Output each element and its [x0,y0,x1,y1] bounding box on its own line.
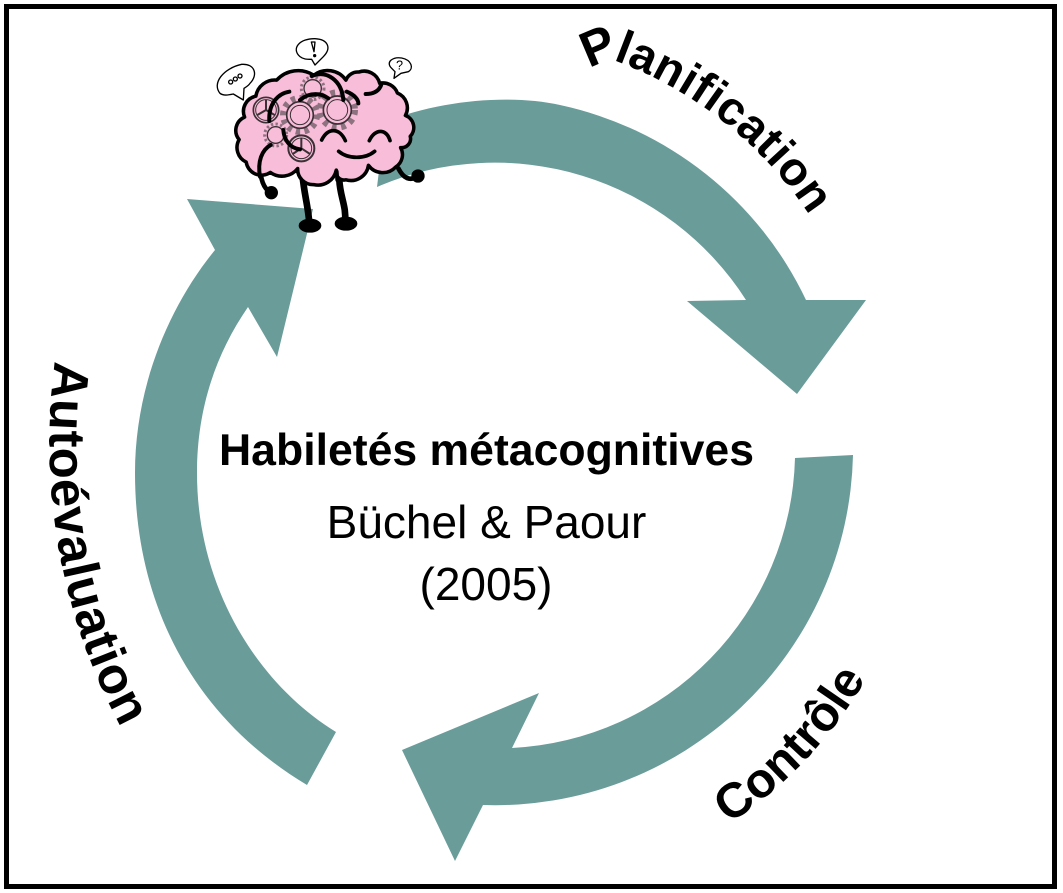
brain folds [259,74,382,180]
label: Planification: P [571,14,624,78]
arrow: autoévaluation [135,199,336,785]
label: Planification: lanification [616,29,826,213]
bubble: question [389,58,411,78]
arrow: planification [377,100,866,394]
thought bubbles [217,39,411,100]
title: Habiletés métacognitives [219,426,754,475]
year: (2005) [420,558,552,610]
face [322,131,390,157]
label: Autoévaluation: Autoévaluation [49,362,142,725]
brain body [236,71,414,185]
author: Büchel & Paour [327,496,646,548]
bubble: question: ? [396,58,403,72]
gears [253,77,355,161]
arms [261,167,425,199]
arrow: contrôle [402,455,853,861]
bubble: dots [217,64,255,100]
icon: brain character [217,39,425,231]
legs and feet [300,177,356,231]
bubble: exclamation [296,39,328,65]
label: Contrôle: Contrôle [716,670,862,818]
